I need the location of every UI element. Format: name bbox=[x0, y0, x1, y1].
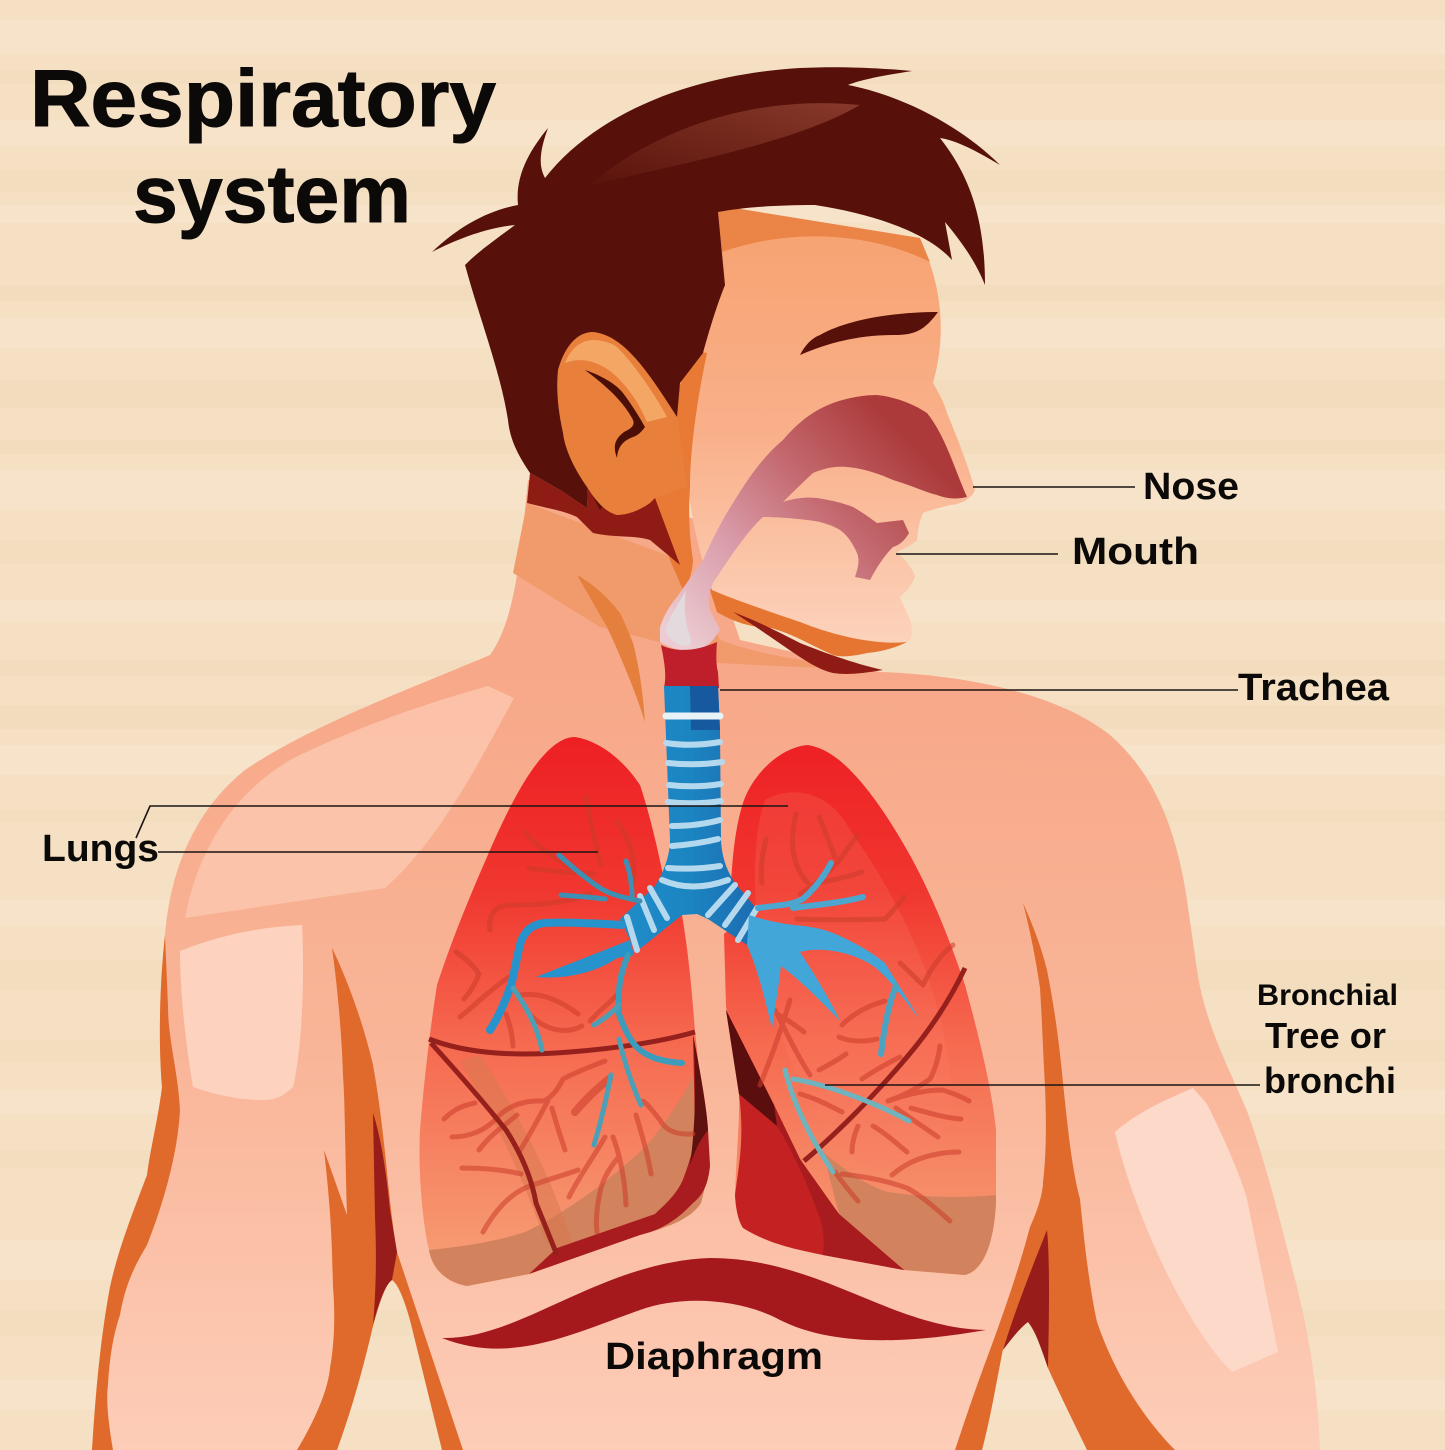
ear rim bbox=[565, 340, 667, 422]
neck fold bbox=[577, 575, 645, 722]
left lung medial dark band bbox=[529, 1035, 710, 1274]
right lower teal twigs bbox=[785, 1070, 909, 1172]
eyebrow bbox=[800, 312, 938, 355]
face bbox=[686, 205, 975, 643]
bronchial tree bbox=[490, 855, 919, 1172]
right mid twig bbox=[881, 986, 896, 1054]
head: face and neck bbox=[527, 205, 975, 674]
title line 2: system bbox=[133, 150, 411, 240]
ear inner fold bbox=[585, 370, 645, 458]
label: Lungs: Lungs bbox=[42, 828, 159, 870]
trachea bbox=[620, 642, 757, 952]
left upper twigs bbox=[559, 855, 640, 901]
trachea tube and bifurcation bbox=[620, 686, 756, 952]
right fold shadow bbox=[1003, 1230, 1049, 1368]
shoulder highlight left bbox=[185, 686, 514, 918]
left lower twigs bbox=[513, 988, 641, 1145]
right lung bbox=[724, 745, 996, 1275]
heart red bbox=[726, 1010, 904, 1270]
left lung bbox=[419, 737, 710, 1286]
ear bbox=[557, 332, 687, 515]
hair highlight bbox=[590, 103, 860, 185]
trachea cartilage top bbox=[661, 642, 719, 688]
hair bbox=[432, 67, 1000, 510]
arm highlight left bbox=[180, 925, 303, 1100]
title: Respiratory bbox=[30, 54, 496, 144]
jaw shadow bbox=[733, 612, 883, 674]
trachea shaded side bbox=[690, 686, 720, 730]
lung fissures bbox=[429, 968, 965, 1255]
left lower branch bbox=[619, 955, 682, 1063]
label: Bronchial Tree or bronchi: Tree or bbox=[1265, 1015, 1386, 1056]
label lines bbox=[136, 487, 1260, 1085]
throat highlight bbox=[666, 590, 691, 646]
right torso fold bbox=[955, 903, 1175, 1450]
lungs bbox=[419, 737, 996, 1286]
label: Nose: Nose bbox=[1143, 466, 1239, 508]
body: torso and arms bbox=[92, 480, 1320, 1450]
label: Bronchial Tree or bronchi: Bronchial bbox=[1257, 979, 1398, 1012]
trachea rings bbox=[627, 716, 757, 950]
nasal cavity bbox=[660, 395, 967, 652]
orange strip behind face bbox=[650, 350, 707, 590]
label: Trachea: Trachea bbox=[1238, 667, 1390, 709]
left arm outer edge bbox=[92, 935, 180, 1450]
jaw orange bbox=[705, 575, 907, 656]
left torso fold bbox=[297, 948, 463, 1450]
right lung tan base bbox=[823, 1152, 996, 1275]
forehead shade bbox=[716, 205, 930, 262]
neck shade bbox=[513, 503, 860, 668]
right upper twigs bbox=[758, 863, 863, 908]
heart dark band bbox=[726, 1010, 904, 1270]
right wedge bronchus bbox=[747, 915, 919, 1028]
left lung tan base bbox=[429, 1075, 710, 1286]
left wedge branch bbox=[536, 940, 634, 978]
label: Mouth: Mouth bbox=[1072, 531, 1199, 573]
diaphragm bbox=[442, 1258, 986, 1349]
lung vessels bbox=[444, 797, 969, 1232]
label: Bronchial Tree or bronchi bbox=[1257, 979, 1398, 1101]
heart dark top bbox=[726, 1010, 777, 1126]
left lower lobe band bbox=[460, 1055, 572, 1248]
right lung inner lobe bbox=[755, 792, 952, 1170]
left main bronchus branch bbox=[490, 923, 622, 1030]
left lung medial dark top bbox=[690, 1035, 708, 1165]
label: Bronchial Tree or bronchi: bronchi bbox=[1264, 1060, 1396, 1101]
arm highlight right bbox=[1115, 1088, 1278, 1372]
neck dark red bbox=[527, 473, 680, 565]
label: Diaphragm: Diaphragm bbox=[605, 1336, 823, 1378]
left fold shadow bbox=[373, 1113, 397, 1325]
